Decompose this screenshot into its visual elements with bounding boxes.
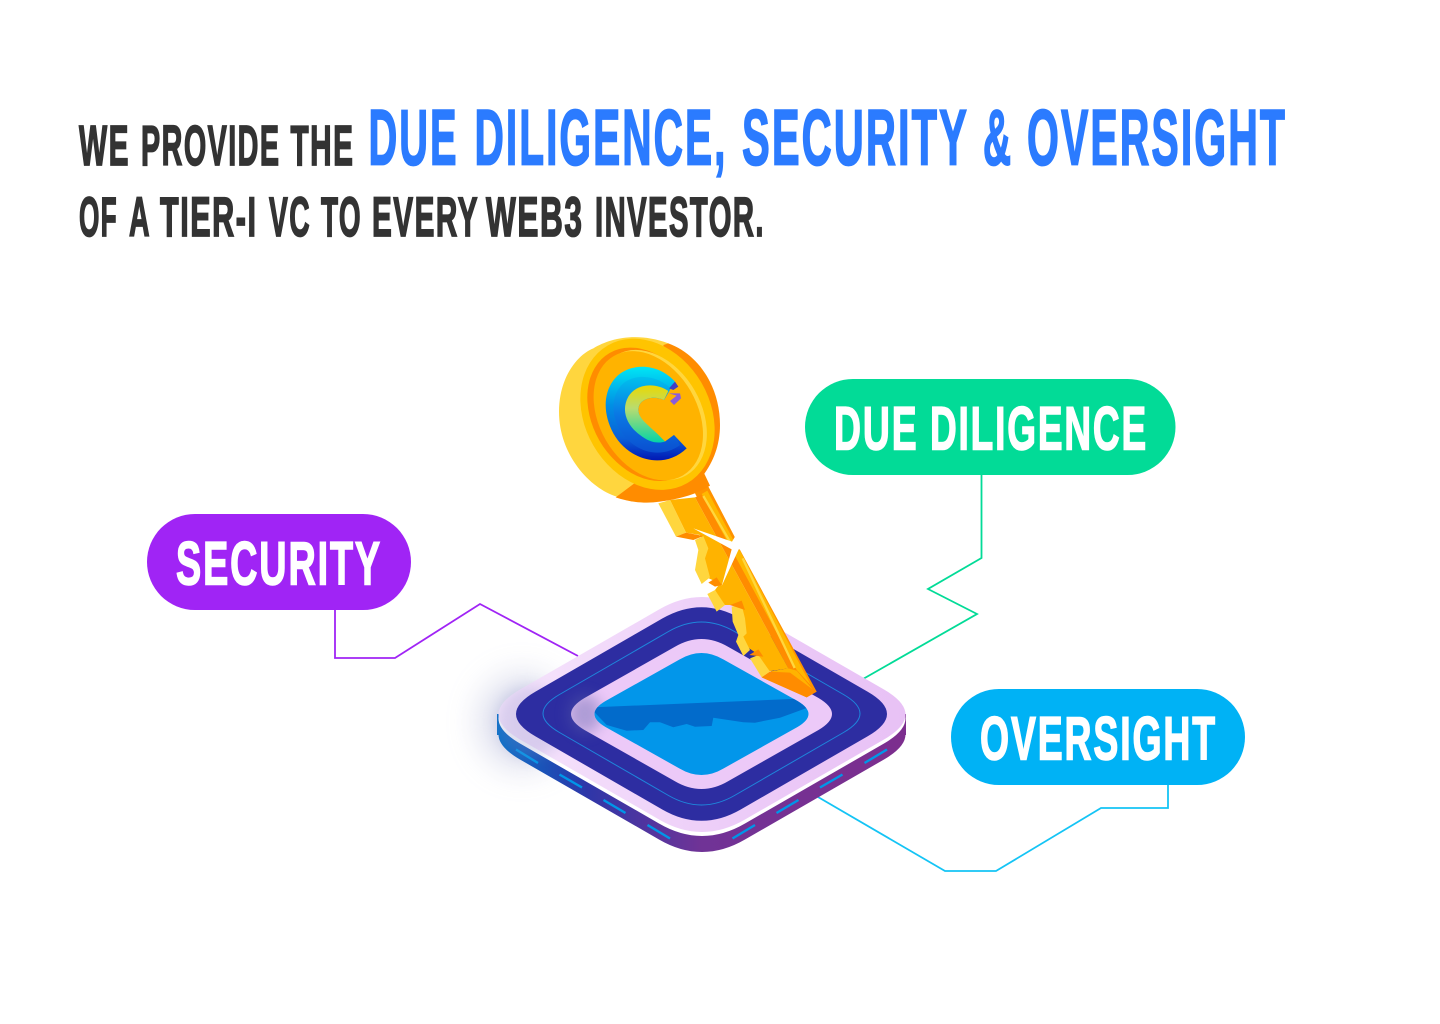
logo inner C [625,385,668,443]
title line one lead-in: PROVIDE [141,114,280,178]
orange notches and tip [676,533,817,697]
side wall dashes [516,750,887,838]
pill text [834,394,1148,462]
pill [805,379,1176,475]
key shadow on pad [590,698,815,731]
connector: due diligence [863,475,982,679]
key head back edge [559,337,683,497]
key head inner highlight [574,330,729,500]
amber face [670,497,788,672]
tip bevel [770,668,813,689]
title line two: EVERY [372,186,479,248]
key head rim [663,343,720,475]
logo middle band [613,377,680,453]
logo superscript mark [669,382,681,405]
shadow behind platform [478,674,566,770]
title line one lead-in [79,114,354,178]
sparkle [693,528,745,586]
key shaft [658,480,817,697]
label: oversight [951,689,1245,785]
pill [147,514,411,610]
title line two: TO [321,186,362,248]
title line two: A [129,186,151,248]
outer orange shaft edge [695,480,817,697]
infographic canvas [78,108,1285,872]
pill text: SECURITY [176,530,382,598]
title [79,92,1287,248]
title line one lead-in: THE [290,114,354,178]
white rim [498,601,906,836]
isometric platform [496,597,906,852]
lilac top surface [498,597,906,832]
label: due diligence [805,379,1176,475]
title highlighted phrase: SECURITY [742,92,969,182]
right bevel [702,491,813,690]
blue centre pad [594,653,808,775]
yellow tooth sides [658,500,770,677]
icon: C logo [606,367,687,460]
title highlighted phrase: DUE [368,92,458,182]
shadow on inner ring [568,694,602,734]
indigo band [516,607,887,821]
shadow on lilac edge [496,686,564,758]
key head inner crescent [564,327,726,502]
pill [951,689,1245,785]
icon: golden key [554,314,817,697]
title line two: INVESTOR. [595,186,765,248]
pill text: OVERSIGHT [980,704,1217,772]
key neck shadow [616,472,710,503]
title highlighted phrase: & [983,92,1013,182]
connector: oversight [818,785,1168,871]
label: security [147,514,411,610]
thin circuit line [543,622,860,805]
inner orange strip [695,495,797,670]
title highlighted phrase: DILIGENCE, [474,92,728,182]
key head face [554,314,741,514]
yellow highlight stripes [703,496,795,668]
connector: security [335,604,578,658]
pill text: DUE [834,394,918,462]
pill text: DILIGENCE [930,394,1148,462]
title line two: TIER-I [160,186,258,248]
inner lilac ring [571,639,832,789]
title line two [79,186,765,248]
title line two: WEB3 [486,186,584,248]
title line two: VC [269,186,311,248]
key head inner disk [571,331,725,500]
title line one lead-in: WE [79,114,130,178]
title highlighted phrase [368,92,1287,182]
platform side wall [497,617,906,852]
logo outer C [606,367,687,460]
title line two: OF [79,186,118,248]
